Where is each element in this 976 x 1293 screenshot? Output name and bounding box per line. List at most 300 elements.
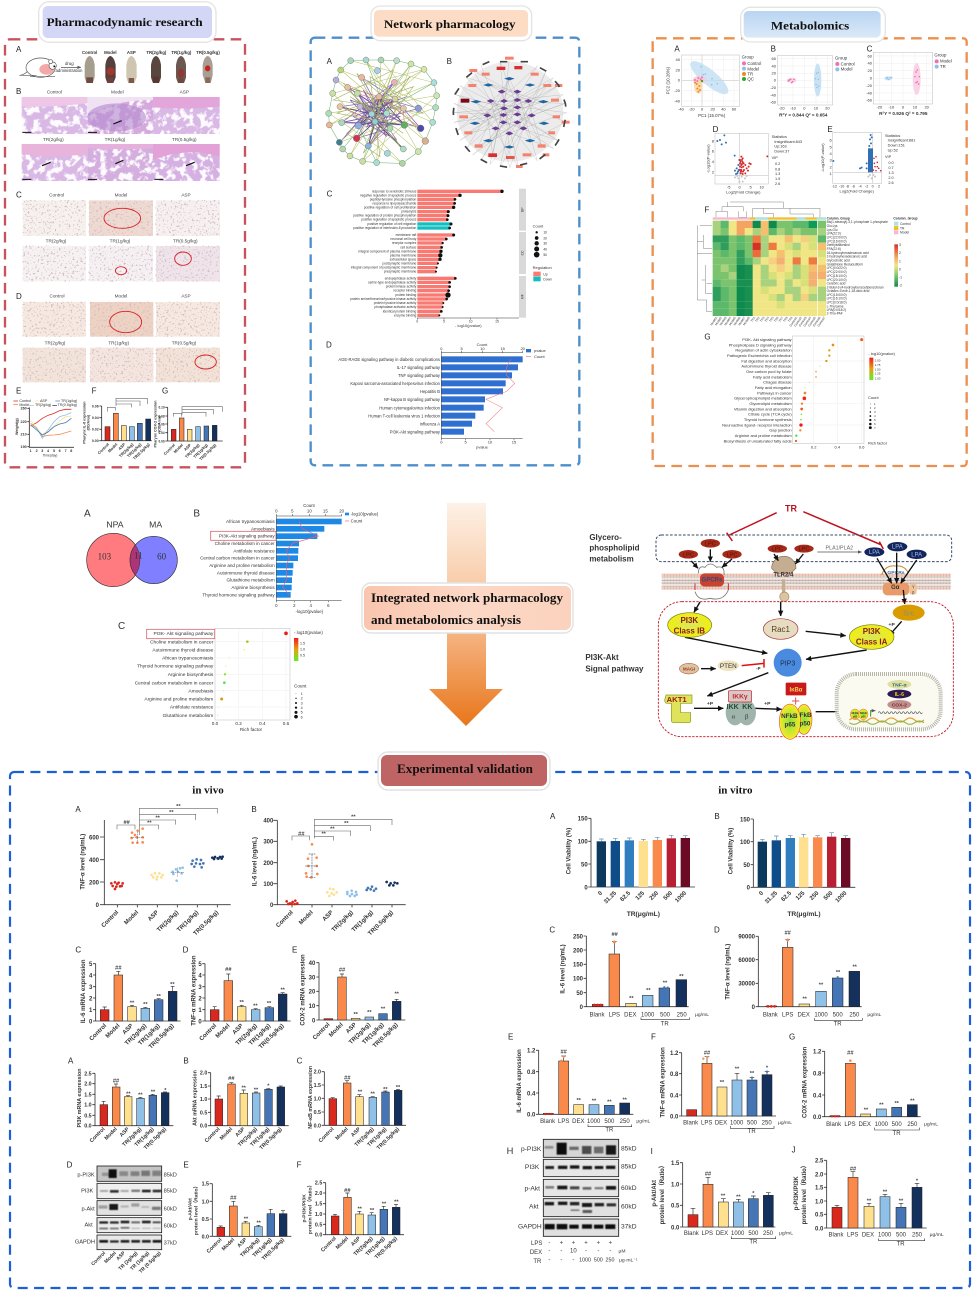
- sub-panel B: H and E stained sections: Control: [47, 89, 62, 94]
- chart B: IL-6 level scatter plot: ##: [298, 831, 305, 837]
- chart E: volcano plot model versus TR: 4: [829, 151, 832, 156]
- heading: integrated network pharmacology and metabolomics analysis: [362, 583, 573, 633]
- chart F: TNF-alpha mRNA in vitro: *: [766, 1065, 769, 1071]
- chart C: GO enrichment bar chart: BP: [521, 207, 525, 212]
- chart C: GO enrichment bar chart: integral component of postsynaptic membrane: [351, 266, 417, 270]
- chart G: COX-2 mRNA in vitro: **: [894, 1101, 900, 1107]
- glycerophospholipid metabolism box with lipids: LPC: [683, 552, 694, 558]
- sub-panel E: body weight line chart: E: [16, 386, 21, 395]
- chart J: p-PI3K/PI3K in vitro: 1000: [878, 1233, 892, 1239]
- chart C: GO enrichment bar chart: [327, 189, 552, 328]
- chart C: pathway bubble plot: [118, 621, 323, 732]
- chart C: pathway bubble plot: - log10(pvalue): [294, 630, 323, 635]
- legend: count and regulation: Up: [543, 272, 548, 276]
- chart E: volcano plot model versus TR: -12: [832, 185, 837, 189]
- chart C: IL-6 level in vitro: 150: [573, 963, 584, 969]
- sub-panel D: immunohistochemistry stain two: D: [16, 292, 22, 301]
- chart D: western blot in vivo: 37kD: [164, 1240, 177, 1246]
- chart C: IL-6 level in vitro: [549, 925, 709, 1028]
- chart C: GO enrichment bar chart: positive regulation of cell proliferation: [364, 205, 417, 209]
- chart A: PCA score plot: 40: [721, 107, 726, 112]
- chart J: p-PI3K/PI3K in vitro: ##: [850, 1166, 857, 1172]
- sub-panel F: pharynx IL-6 bar chart: [82, 386, 152, 461]
- chart B: KEGG enrichment of shared targets: 5: [291, 509, 294, 514]
- chart F: metabolite heatmap: Lys-Glu: [827, 228, 838, 232]
- chart B: OPLS-DA control versus model: Group: [835, 56, 848, 61]
- node: IKK complex: β: [745, 714, 749, 721]
- chart C: GO enrichment bar chart: protein kinase activity: [386, 285, 417, 289]
- chart F: metabolite heatmap: F: [704, 206, 709, 215]
- node: MAGI and PTEN inhibition: -P: [756, 666, 761, 671]
- chart B: KEGG enrichment of shared targets: 4: [309, 603, 312, 608]
- chart D: TNF-alpha mRNA expression: **: [239, 1000, 245, 1006]
- legend: heatmap groups and colour scale: [893, 216, 918, 288]
- chart F: p-PI3K/PI3K protein level: Control: [320, 1235, 338, 1253]
- chart B: Akt mRNA expression: 2.0: [200, 1071, 207, 1077]
- sub-panel A: mouse drug administration and stomach specimens: [16, 45, 220, 83]
- node: IKK complex: IKKγ: [732, 694, 748, 701]
- chart B: OPLS-DA control versus model: -40: [770, 92, 777, 97]
- node: PI3K Class IA: Class IA: [856, 638, 888, 647]
- chart H: western blot in vitro: 37kD: [621, 1223, 637, 1230]
- chart E: IL-6 mRNA in vitro: **: [576, 1098, 582, 1104]
- chart D: western blot in vivo: 85kD: [164, 1189, 177, 1195]
- sub-panel G: pharynx COX-2 bar chart: TR(1g/kg): [192, 442, 209, 459]
- sub-panel G: pharynx COX-2 bar chart: [154, 386, 223, 461]
- sub-panel B: H and E stained sections: TR(0.5g/kg): [172, 137, 197, 142]
- chart C: GO enrichment bar chart: endopeptidase activity: [385, 276, 417, 280]
- heading: metabolomics: [741, 7, 885, 42]
- chart J: p-PI3K/PI3K in vitro: **: [883, 1189, 888, 1195]
- node: MAGI and PTEN inhibition: [679, 659, 764, 674]
- chart C: OPLS-DA model versus TR: 60: [868, 53, 873, 58]
- table: treatment conditions: DEX: [530, 1250, 542, 1256]
- chart D: KEGG enrichment bar chart: NF-kappa B signaling pathway: [384, 397, 441, 402]
- chart C: pathway bubble plot: Antifolate resistance: [170, 705, 214, 711]
- chart C: IL-6 level in vitro: ##: [612, 932, 619, 938]
- heading: network pharmacology: [371, 6, 532, 41]
- sub-panel A: mouse drug administration and stomach specimens: administration: [56, 68, 83, 73]
- chart E: IL-6 mRNA in vitro: 250: [620, 1119, 630, 1125]
- stomach specimens: TR(0.5g/kg): [196, 50, 220, 55]
- chart E: volcano plot model versus TR: -8: [846, 185, 849, 189]
- chart B: IL-6 level scatter plot: 300: [263, 840, 274, 846]
- chart E: COX-2 mRNA expression: **: [381, 1007, 386, 1013]
- chart B: cell viability 2: 50: [743, 863, 751, 869]
- chart J: p-PI3K/PI3K in vitro: 0.5: [815, 1213, 824, 1219]
- chart A: PI3K mRNA expression: 2.5: [84, 1071, 92, 1077]
- chart F: p-PI3K/PI3K protein level: 1.5: [315, 1202, 322, 1208]
- chart E: volcano plot model versus TR: 0.0: [888, 161, 894, 165]
- sub-panel D: immunohistochemistry stain two: TR(1g/kg): [108, 340, 129, 345]
- chart C: GO enrichment bar chart: membrane raft: [396, 233, 416, 237]
- sub-panel F: pharynx IL-6 bar chart: F: [92, 386, 97, 395]
- chart H: western blot in vitro: 85kD: [621, 1164, 637, 1171]
- sub-panel C: immunohistochemistry stain one: Model: [115, 193, 127, 198]
- sub-panel D: immunohistochemistry stain two: Control: [49, 294, 65, 299]
- table: treatment conditions: +: [609, 1240, 613, 1246]
- chart B: IL-6 level scatter plot: **: [321, 832, 327, 838]
- chart E: volcano plot model versus TR: 2: [829, 165, 832, 170]
- chart G: metabolic pathway bubble plot: 0.2: [811, 444, 817, 449]
- chart E: p-Akt/Akt protein level: Control: [206, 1237, 224, 1255]
- chart E: IL-6 mRNA in vitro: 0.0: [527, 1113, 536, 1119]
- chart D: KEGG enrichment bar chart: 20: [520, 346, 526, 351]
- chart J: p-PI3K/PI3K in vitro: [792, 1146, 944, 1248]
- chart D: volcano plot control versus model: Down:37: [774, 149, 789, 153]
- chart C: NF-kB mRNA expression: Model: [335, 1126, 350, 1142]
- chart J: p-PI3K/PI3K in vitro: **: [867, 1199, 872, 1205]
- TR inhibition lines: [727, 503, 883, 549]
- sub-panel E: body weight line chart: [13, 386, 77, 458]
- chart D: KEGG enrichment bar chart: 15: [512, 440, 517, 445]
- chart B: cell viability 2: 0: [758, 890, 766, 897]
- chart H: western blot in vitro: p-Akt: [524, 1186, 540, 1193]
- chart C: GO enrichment bar chart: presynaptic membrane: [384, 270, 417, 274]
- chart C: GO enrichment bar chart: receptor complex: [392, 241, 417, 245]
- chart B: Akt mRNA expression: 1.5: [200, 1084, 207, 1090]
- chart F: metabolite heatmap: Control5: [807, 316, 817, 327]
- table: treatment conditions: μg·mL⁻¹: [619, 1257, 638, 1263]
- chart E: volcano plot model versus TR: -4: [858, 185, 862, 189]
- chart G: COX-2 mRNA in vitro: G: [789, 1032, 795, 1041]
- sub-panel D: immunohistochemistry stain two: [16, 292, 220, 382]
- chart A: PI3K mRNA expression: ##: [113, 1079, 120, 1085]
- nucleus with transcription of cytokines: IL-6: [895, 692, 904, 698]
- sub-panel F: pharynx IL-6 bar chart: 0.00: [92, 439, 99, 443]
- stomach specimens: [82, 50, 220, 83]
- chart D: TNF-alpha mRNA expression: [183, 946, 291, 1050]
- chart D: volcano plot control versus model: 4: [712, 159, 715, 164]
- chart J: p-PI3K/PI3K in vitro: p-PI3K/PI3K: [794, 1176, 800, 1210]
- chart D: TNF-alpha level in vitro: LPS: [782, 1012, 793, 1018]
- sub-panel E: body weight line chart: TR(2g/kg): [35, 403, 51, 407]
- node: IκBα and NF-κB: NFkB: [781, 713, 798, 720]
- chart D: TNF-alpha level in vitro: μg/mL: [867, 1012, 882, 1018]
- chart E: IL-6 mRNA in vitro: DEX: [572, 1119, 584, 1125]
- chart C: pathway bubble plot: 6: [301, 715, 303, 719]
- chart B: KEGG enrichment of shared targets: -log10(pvalue): [351, 511, 379, 516]
- chart F: TNF-alpha mRNA in vitro: LPS: [701, 1121, 712, 1127]
- chart B: KEGG enrichment of shared targets: 0: [275, 603, 278, 608]
- chart A: PI3K mRNA expression: **: [138, 1093, 143, 1099]
- chart C: GO enrichment bar chart: 5: [443, 320, 445, 324]
- chart A: cell viability 1: 100: [578, 840, 588, 846]
- node: IκBα and NF-κB: IκBα: [789, 687, 803, 693]
- chart C: NF-kB mRNA expression: 1.0: [314, 1096, 321, 1102]
- panel: in vivo upper charts: [75, 785, 406, 1050]
- sub-panel E: body weight line chart: 210: [21, 433, 27, 437]
- chart A: TNF-alpha level scatter plot: 400: [89, 858, 100, 864]
- chart B: OPLS-DA control versus model: 60: [772, 56, 777, 61]
- nucleus with transcription of cytokines: p50: [861, 714, 866, 718]
- chart C: pathway bubble plot: 3: [301, 701, 303, 705]
- chart I: p-Akt/Akt in vitro: Blank: [684, 1231, 699, 1237]
- chart C: IL-6 level in vitro: DEX: [624, 1012, 636, 1018]
- legend: count and regulation: 10: [543, 231, 547, 235]
- chart E: p-Akt/Akt protein level: 0.5: [202, 1217, 209, 1223]
- sub-panel G: pharynx COX-2 bar chart: 0.04: [159, 431, 165, 435]
- table: treatment conditions: -: [572, 1258, 574, 1264]
- receptor: TLR2/4: [772, 556, 796, 601]
- legend: heatmap groups and colour scale: TR: [900, 226, 905, 230]
- sub-panel G: pharynx COX-2 bar chart: 0.06: [159, 422, 165, 426]
- sub-panel G: pharynx COX-2 bar chart: TR(0.5g/kg): [198, 442, 218, 461]
- chart B: cell viability 2: 150: [740, 817, 751, 823]
- chart G: metabolic pathway bubble plot: Vitamin digestion and absorption: [734, 406, 792, 411]
- chart D: KEGG enrichment bar chart: Count: [477, 342, 488, 347]
- panel: in vitro upper charts: [549, 785, 882, 1028]
- chart E: IL-6 mRNA in vitro: **: [607, 1099, 612, 1105]
- chart A: TNF-alpha level scatter plot: **: [169, 810, 174, 816]
- chart E: COX-2 mRNA expression: 20: [309, 990, 316, 996]
- chart A: TNF-alpha level scatter plot: ##: [124, 820, 131, 826]
- chart F: metabolite heatmap: L-Thyroxine: [827, 304, 844, 308]
- sub-panel E: body weight line chart: 3: [41, 449, 43, 453]
- chart J: p-PI3K/PI3K in vitro: 2.0: [815, 1172, 824, 1178]
- text: glycerophospholipid metabolism label: Glycero-: [589, 533, 622, 542]
- chart E: IL-6 mRNA in vitro: 0.8: [527, 1070, 536, 1076]
- chart D: KEGG enrichment bar chart: [326, 340, 547, 450]
- chart D: volcano plot control versus model: 2.6: [775, 182, 780, 186]
- chart A: PI3K mRNA expression: **: [151, 1090, 156, 1096]
- chart C: IL-6 level in vitro: 250: [573, 934, 584, 940]
- chart C: GO enrichment bar chart: 15: [495, 320, 499, 324]
- table: treatment conditions: +: [584, 1240, 588, 1246]
- table: treatment conditions: -: [560, 1258, 562, 1264]
- chart E: p-Akt/Akt protein level: 1.5: [202, 1182, 209, 1188]
- chart A: cell viability 1: TR(μg/mL): [627, 911, 660, 918]
- legend: count and regulation: 50: [543, 253, 547, 257]
- chart F: metabolite heatmap: TR3: [759, 316, 766, 323]
- chart I: p-Akt/Akt in vitro: DEX: [716, 1231, 728, 1237]
- chart B: KEGG enrichment of shared targets: 6: [327, 603, 330, 608]
- node: IκBα and NF-κB: FkB: [800, 712, 812, 719]
- heading: pharmacodynamic research: [39, 2, 216, 42]
- nucleus with transcription of cytokines: COX-2: [892, 703, 907, 709]
- chart G: metabolic pathway bubble plot: Fatty acid metabolism: [753, 374, 792, 379]
- chart G: metabolic pathway bubble plot: Autoimmune thyroid disease: [741, 364, 792, 369]
- table: treatment conditions: 500: [594, 1258, 603, 1264]
- chart D: western blot in vivo: p-PI3K: [77, 1172, 95, 1178]
- chart D: KEGG enrichment bar chart: 0: [440, 440, 443, 445]
- chart I: p-Akt/Akt in vitro: 1000: [731, 1231, 745, 1237]
- chart F: metabolite heatmap: Bis(1-stearoyl)-3,1'-phosphate 1-phosphate: [827, 220, 888, 224]
- chart C: GO enrichment bar chart: enzyme binding: [394, 313, 417, 317]
- chart D: TNF-alpha level in vitro: 250: [849, 1012, 860, 1018]
- chart C: IL-6 level in vitro: μg/mL: [695, 1012, 709, 1018]
- chart C: pathway bubble plot: Central carbon metabolism in cancer: [135, 680, 214, 686]
- chart D: TNF-alpha mRNA expression: 0: [198, 1019, 202, 1025]
- chart B: OPLS-DA control versus model: 20: [825, 106, 830, 111]
- chart C: NF-kB mRNA expression: ASP: [350, 1126, 362, 1139]
- chart I: p-Akt/Akt in vitro: **: [721, 1194, 726, 1200]
- chart E: p-Akt/Akt protein level: **: [256, 1220, 262, 1226]
- sub-panel E: body weight line chart: ASP: [40, 399, 48, 403]
- chart C: NF-kB mRNA expression: **: [358, 1089, 363, 1095]
- chart C: IL-6 level in vitro: 500: [660, 1012, 671, 1018]
- chart B: KEGG enrichment of shared targets: Choline metabolism in cancer: [215, 541, 275, 546]
- sub-panel B: H and E stained sections: ASP: [180, 89, 189, 94]
- chart I: p-Akt/Akt in vitro: *: [752, 1191, 755, 1197]
- chart C: OPLS-DA model versus TR: 20: [924, 104, 930, 109]
- chart G: metabolic pathway bubble plot: Regulation of actin cytoskeleton: [735, 348, 792, 353]
- chart D: KEGG enrichment bar chart: Influenza A: [420, 421, 440, 426]
- chart A: PI3K mRNA expression: 0.5: [84, 1113, 92, 1119]
- chart E: volcano plot model versus TR: -10: [839, 185, 844, 189]
- chart C: IL-6 mRNA expression: 1: [89, 1008, 93, 1014]
- chart F: metabolite heatmap: Model3: [719, 316, 728, 326]
- chart B: OPLS-DA control versus model: R²Y = 0.844 Q² = 0.654: [779, 113, 828, 118]
- receptor: GPCRs with G alpha: GPCRs: [887, 570, 905, 576]
- chart A: PI3K mRNA expression: Model: [104, 1126, 119, 1142]
- node: Src: Src: [903, 608, 914, 617]
- stomach specimens: TR(2g/kg): [146, 50, 167, 55]
- chart J: p-PI3K/PI3K in vitro: DEX: [862, 1233, 874, 1239]
- sub-panel F: pharynx IL-6 bar chart: 0.04: [92, 416, 99, 420]
- receptor: GPCRs with G alpha: β: [912, 589, 915, 594]
- chart E: p-Akt/Akt protein level: ##: [230, 1196, 237, 1202]
- chart E: volcano plot model versus TR: -Log10(P-value): [820, 143, 825, 172]
- chart G: metabolic pathway bubble plot: 3: [874, 410, 876, 414]
- sub-panel E: body weight line chart: 2: [36, 449, 38, 453]
- sub-panel F: pharynx IL-6 bar chart: TR(1g/kg): [126, 441, 143, 458]
- stomach specimens: TR(1g/kg): [171, 50, 192, 55]
- chart G: COX-2 mRNA in vitro: 250: [907, 1122, 918, 1128]
- chart D: KEGG enrichment bar chart: TNF signaling pathway: [398, 373, 441, 378]
- receptor: GPCRs with G alpha: γ: [912, 584, 914, 589]
- chart F: TNF-alpha mRNA in vitro: 500: [747, 1121, 758, 1127]
- node: AKT1: [665, 695, 771, 723]
- chart E: volcano plot model versus TR: 6: [829, 137, 832, 142]
- chart C: IL-6 mRNA expression: [75, 946, 181, 1050]
- legend: count and regulation: Regulation: [533, 265, 552, 270]
- chart D: western blot in vivo: Akt: [84, 1223, 93, 1229]
- chart F: metabolite heatmap: Diethylstilbestrol: [827, 243, 850, 247]
- chart A: TNF-alpha level scatter plot: Model: [124, 910, 140, 926]
- sub-panel E: body weight line chart: TR(0.5g/kg): [58, 403, 77, 407]
- chart C: GO enrichment bar chart: protein serine/threonine/tyrosine kinase activity: [350, 297, 417, 301]
- chart C: pathway bubble plot: Amoebiasis: [188, 688, 214, 694]
- glycerophospholipid metabolism box with lipids: [656, 535, 952, 562]
- node: IKK complex: [726, 691, 756, 725]
- chart C: pathway bubble plot: 5: [301, 711, 303, 715]
- chart C: pathway bubble plot: 0.6: [283, 721, 290, 726]
- chart E: p-Akt/Akt protein level: ASP: [236, 1237, 249, 1249]
- chart D: TNF-alpha level in vitro: **: [819, 983, 824, 989]
- chart C: IL-6 level in vitro: 50: [576, 991, 584, 997]
- chart C: pathway bubble plot: 0.2: [235, 721, 242, 726]
- chart D: KEGG enrichment bar chart: 10: [488, 440, 493, 445]
- table: treatment conditions: 1000: [579, 1258, 591, 1264]
- chart E: volcano plot model versus TR: 1.3: [888, 171, 894, 175]
- chart G: metabolic pathway bubble plot: 1.50: [875, 367, 881, 371]
- legend: heatmap groups and colour scale: Model: [900, 231, 909, 235]
- chart G: metabolic pathway bubble plot: 1.00: [875, 376, 881, 380]
- chart I: p-Akt/Akt in vitro: 1.0: [671, 1182, 680, 1188]
- node: Src: [893, 605, 925, 621]
- chart E: volcano plot model versus TR: 3: [829, 158, 832, 163]
- chart F: metabolite heatmap: Glycocholic acid: [827, 258, 850, 262]
- sub-panel A: mouse drug administration and stomach specimens: A: [16, 45, 22, 54]
- chart C: NF-kB mRNA expression: **: [370, 1092, 376, 1098]
- chart A: cell viability 1: 250: [649, 890, 661, 902]
- chart F: metabolite heatmap: LPA(0:0/18:2): [827, 308, 846, 312]
- chart D: TNF-alpha level in vitro: 0: [752, 1005, 756, 1011]
- chart A: PI3K mRNA expression: 1.5: [84, 1092, 92, 1098]
- chart F: metabolite heatmap: 2-hydroxyhexadecanoic acid: [827, 255, 867, 259]
- panel: integrated target overlap and enrichment: [84, 503, 379, 732]
- chart G: metabolic pathway bubble plot: 4: [874, 414, 876, 418]
- sub-panel G: pharynx COX-2 bar chart: G: [162, 386, 168, 395]
- chart B: Akt mRNA expression: TR(2g/kg): [237, 1126, 259, 1148]
- chart G: metabolic pathway bubble plot: 5: [874, 418, 876, 422]
- chart B: Akt mRNA expression: Akt mRNA expression: [192, 1070, 198, 1126]
- chart B: KEGG enrichment of shared targets: 20: [339, 509, 345, 514]
- chart G: COX-2 mRNA in vitro: DEX: [859, 1122, 871, 1128]
- chart F: metabolite heatmap: Model2: [714, 316, 723, 326]
- node: IκBα and NF-κB: p50: [800, 720, 811, 727]
- chart E: IL-6 mRNA in vitro: μg/mL: [636, 1118, 651, 1124]
- chart A: Venn diagram: [84, 509, 177, 587]
- chart C: IL-6 level in vitro: C: [549, 925, 555, 934]
- chart D: western blot in vivo: PI3K: [81, 1188, 94, 1194]
- chart A: protein interaction network: [326, 57, 440, 166]
- chart D: volcano plot control versus model: 10: [759, 185, 765, 190]
- chart C: NF-kB mRNA expression: TR(1g/kg): [366, 1126, 388, 1148]
- sub-panel G: pharynx COX-2 bar chart: ASP: [183, 442, 192, 452]
- legend: PCA groups: QC: [747, 77, 754, 82]
- chart F: p-PI3K/PI3K protein level: TR(0.5g/kg): [374, 1236, 399, 1261]
- legend: heatmap groups and colour scale: 2: [899, 251, 901, 255]
- chart E: volcano plot model versus TR: Statistics: [885, 134, 900, 138]
- node: PI3K Class IB: PI3K: [680, 616, 698, 625]
- chart B: Akt mRNA expression: 0.5: [200, 1110, 207, 1116]
- chart C: GO enrichment bar chart: phosphatase activator activity: [375, 305, 417, 309]
- chart F: metabolite heatmap: Octadec-9-ene-1,18-dioic acid: [827, 289, 870, 293]
- chart C: pathway bubble plot: Arginine biosynthesis: [168, 672, 214, 678]
- chart J: p-PI3K/PI3K in vitro: 500: [896, 1233, 907, 1239]
- sub-panel F: pharynx IL-6 bar chart: ASP: [117, 442, 127, 451]
- chart J: p-PI3K/PI3K in vitro: J: [792, 1146, 796, 1155]
- chart D: TNF-alpha level in vitro: 500: [833, 1012, 843, 1018]
- chart G: COX-2 mRNA in vitro: ##: [847, 1051, 854, 1057]
- chart B: KEGG enrichment of shared targets: Count: [303, 503, 316, 508]
- chart A: Venn diagram: A: [84, 509, 91, 520]
- chart C: GO enrichment bar chart: proteolysis: [401, 210, 417, 214]
- chart C: GO enrichment bar chart: C: [327, 190, 333, 199]
- chart C: OPLS-DA model versus TR: [866, 45, 952, 116]
- chart C: pathway bubble plot: African trypanosomiasis: [162, 656, 214, 662]
- chart A: TNF-alpha level scatter plot: **: [155, 815, 161, 821]
- chart F: p-PI3K/PI3K protein level: **: [382, 1202, 387, 1208]
- chart G: COX-2 mRNA in vitro: Blank: [826, 1122, 841, 1128]
- chart C: IL-6 mRNA expression: 2: [89, 996, 93, 1002]
- chart B: cell viability 2: 1000: [835, 890, 849, 904]
- chart A: protein interaction network: A: [327, 57, 333, 66]
- chart D: western blot in vivo: D: [67, 1160, 73, 1169]
- chart G: metabolic pathway bubble plot: Neuroactive ligand- receptor interaction: [722, 422, 792, 427]
- chart A: cell viability 1: Cell Viability (%): [567, 828, 573, 874]
- chart F: p-PI3K/PI3K protein level: **: [357, 1207, 363, 1213]
- chart D: TNF-alpha mRNA expression: 2: [198, 996, 202, 1002]
- chart E: volcano plot model versus TR: 2: [878, 185, 880, 189]
- chart D: TNF-alpha level in vitro: D: [714, 925, 720, 934]
- legend: heatmap groups and colour scale: Column_Group: [893, 216, 918, 220]
- chart F: TNF-alpha mRNA in vitro: **: [750, 1071, 755, 1077]
- arrow: integration flow: [429, 503, 503, 726]
- chart F: TNF-alpha mRNA in vitro: TNF-α mRNA expression: [661, 1047, 667, 1117]
